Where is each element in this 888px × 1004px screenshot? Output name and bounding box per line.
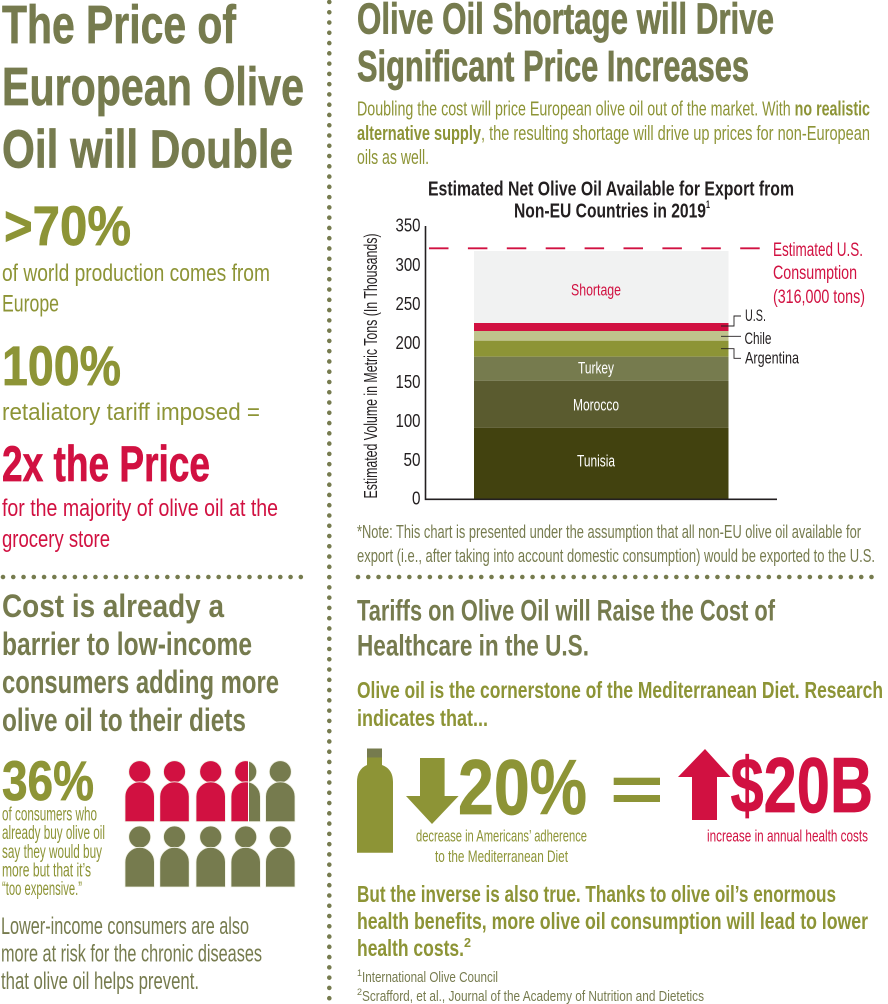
stat: 2x the price: grocery store [2,526,110,553]
bar: Chile [474,331,728,341]
bar: shortage [474,251,728,323]
stat: 36 percent of consumers: say they would buy [2,842,102,863]
consumption line [429,247,760,249]
y axis tick labels: 250 [396,294,420,314]
bar: Turkey [474,357,728,381]
footnotes: 1 [357,968,362,978]
title [2,0,304,180]
icon: down arrow [406,758,459,824]
title: European Olive [2,57,304,117]
stat: 20 percent decrease: to the Mediterranean Diet [435,847,568,866]
y axis tick labels [396,216,420,508]
text: lower-income consumers: Lower-income consumers are also [1,913,249,940]
stat: 36 percent of consumers: already buy olive oil [2,823,105,844]
pictogram: ten people, 36 percent red [125,761,295,887]
consumption label [773,240,865,308]
heading: cost is a barrier: olive oil to their diets [2,702,246,738]
bar: Morocco: Morocco [573,396,619,415]
stat: 20 percent decrease: 20% [458,743,587,831]
y axis tick labels: 50 [404,450,420,470]
icon: equals sign [614,778,660,802]
y axis tick labels: 100 [396,411,420,431]
text: lower-income consumers: more at risk for the chronic diseases [1,941,262,968]
stat: 70 percent from Europe: Europe [2,291,59,318]
consumption label: Consumption [773,263,857,284]
stat: 36 percent of consumers: 36% [2,749,94,812]
chart note [357,522,875,566]
chart title: Non-EU Countries in 2019 [514,201,706,223]
stat: 36 percent of consumers [2,749,105,900]
bar: shortage: Shortage [571,281,621,300]
y axis tick labels: 0 [412,488,420,508]
y axis tick labels: 300 [396,255,420,275]
heading: cost is a barrier: consumers adding more [2,664,279,700]
stat: 100 percent tariff [2,334,260,426]
footnotes [357,968,704,1004]
text: inverse is also true: health costs. [357,935,464,961]
stat: 70 percent from Europe [2,194,270,318]
bar: Tunisia: Tunisia [577,452,615,471]
stat: 20 percent decrease [416,743,587,866]
chart title: 1 [706,199,710,211]
callout labels: U.S., Chile, Argentina: Chile [744,329,772,348]
y axis label: Estimated Volume in Metric Tons (In Thousands) [361,234,381,498]
text: lower-income consumers [1,913,262,995]
bar: Tunisia [474,428,728,499]
footnotes: International Olive Council [362,969,498,986]
stat: 36 percent of consumers: “too expensive.” [2,879,82,900]
stat: 36 percent of consumers: more but that it’s [2,861,91,882]
bar: U.S. [474,323,728,331]
heading: cost is a barrier: Cost is already a [2,588,224,624]
y axis tick labels: 150 [396,372,420,392]
paragraph: shortage explanation: oils as well. [357,147,429,169]
chart title [428,178,794,223]
heading: tariffs raise cost of healthcare: Healthcare in the U.S. [357,630,589,663]
text: lower-income consumers: that olive oil helps prevent. [1,968,199,995]
stat: 70 percent from Europe: of world production comes from [2,260,270,287]
footnotes: 2 [357,987,362,997]
title: Oil will Double [2,120,293,180]
stat: 20 percent decrease: decrease in Americans’ adherence [416,827,587,846]
icon: up arrow [678,749,730,820]
bar: Turkey: Turkey [578,358,614,378]
chart title: Estimated Net Olive Oil Available for Export from [428,178,794,200]
y axis tick labels: 200 [396,333,420,353]
heading: olive oil shortage [357,0,774,91]
bar: Morocco [474,381,728,428]
bar: Argentina [474,341,728,357]
stat: 100 percent tariff: 100% [2,334,121,397]
stat: 2x the price [2,436,278,553]
stat: 36 percent of consumers: of consumers who [2,805,97,826]
stat: 20 billion increase [707,741,873,846]
stacked bar chart [361,216,865,508]
y axis tick labels: 350 [396,216,420,236]
icon: olive oil bottle [357,748,393,853]
axes [426,226,777,499]
heading: cost is a barrier: barrier to low-income [2,626,252,662]
callout labels: U.S., Chile, Argentina: U.S. [745,306,766,325]
text: inverse is also true [357,881,868,961]
stat: 100 percent tariff: retaliatory tariff imposed = [2,399,260,426]
paragraph: shortage explanation [357,99,870,169]
stat: 2x the price: 2x the Price [2,436,210,492]
heading: tariffs raise cost of healthcare [357,595,776,663]
callout labels: U.S., Chile, Argentina: Argentina [745,349,799,368]
subheading: Mediterranean Diet: indicates that... [357,705,488,731]
text: inverse is also true: 2 [464,935,471,950]
stat: 2x the price: for the majority of olive oil at the [2,495,278,522]
stat: 70 percent from Europe: >70% [4,194,131,257]
subheading: Mediterranean Diet [357,677,883,731]
callout labels: U.S., Chile, Argentina [721,306,799,368]
heading: cost is a barrier [2,588,279,738]
